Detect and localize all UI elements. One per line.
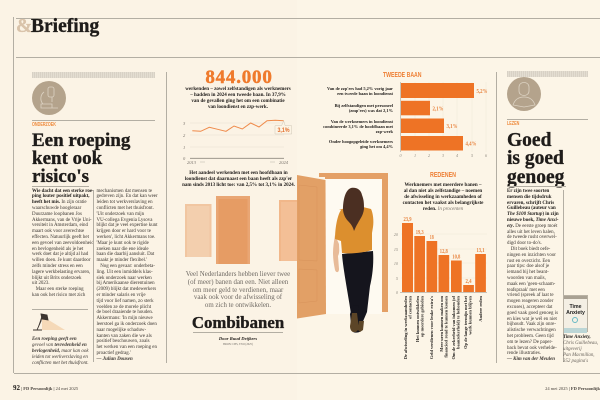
horizontal bar chart: 6 — [485, 153, 488, 158]
bar labels: zzp-werk Onder hoogopgeleide werknemers — [329, 129, 393, 144]
column chart: 0 — [396, 290, 399, 295]
article text: mensen die tijdsdruk — [507, 195, 551, 200]
book caption — [563, 334, 598, 364]
headline: genoeg — [507, 167, 564, 188]
reasons text: de afwisseling in werkzaamheden of — [404, 194, 482, 200]
column one text: zelfs minder stress en een — [32, 264, 83, 269]
footer right: 24 mei 2025 | FD Persoonlijk — [545, 386, 600, 391]
column two text — [96, 188, 158, 362]
line chart: 3 — [183, 121, 186, 126]
article text: Er zijn twee soorten — [507, 189, 549, 194]
chart caption: loondienst dat daarnaast een baan heeft als zzp'er — [185, 176, 292, 182]
article text: digd door to-do's. — [507, 241, 542, 246]
column two text: zoeken naar die ene ideale — [96, 247, 149, 252]
column chart: financieel rond te kunnen komen — [444, 295, 448, 358]
column two text: conflicten met het thuisfront. — [96, 206, 154, 211]
article text: back bevat ook verhelde- — [507, 346, 557, 351]
column two text: positief beschouwen, zoals — [96, 339, 150, 344]
article text: rust en overzicht. Een — [507, 259, 550, 264]
column one text: heeft het mis. In zijn oratie — [32, 200, 87, 205]
bar labels: ging het om 4,4% — [360, 144, 393, 148]
column two text: Nog een gevaar: onderbeta- — [100, 264, 155, 269]
book caption: Pan Macmillan, — [563, 352, 595, 358]
column chart: 19,3 — [416, 230, 424, 236]
column two text: (2009) blijkt dat medewerkers — [96, 287, 156, 292]
headline: Een roeping — [32, 130, 130, 150]
column one text: lagere werkbelasting ervaren, — [32, 270, 90, 275]
chart caption: Het aandeel werkenden met een hoofdbaan in — [189, 170, 288, 176]
column chart: De afwisseling in werkzaamheden — [403, 295, 408, 359]
panel: left article Onderzoek — [32, 72, 158, 366]
quote text: om zich te ontwikkelen. — [205, 302, 271, 309]
article text: alles uit het leven halen, — [507, 230, 555, 235]
headline: risico's — [32, 166, 89, 186]
column one text: en bevlogenheid als je het — [32, 247, 83, 252]
line chart: 1 — [183, 145, 185, 150]
reasons text: Werknemers met meerdere banen – — [404, 182, 482, 188]
article text: en kies wat je wél en niet — [507, 317, 557, 322]
column one text — [32, 188, 94, 298]
quote text: om meer geld te verdienen, maar — [193, 287, 283, 294]
column one text: kan ook het risico met zich — [32, 293, 85, 298]
column one text: Duurzame loopbanen Jos — [32, 212, 82, 217]
icon: desk lamp — [33, 314, 65, 330]
chart caption — [182, 170, 295, 188]
column two text: 'Uit onderzoek van mijn — [96, 212, 144, 217]
column one text: Maar een sterke roeping — [36, 287, 84, 292]
column two text: voelden ze de morele plicht — [96, 305, 151, 310]
article text: rende illustraties. — [507, 351, 541, 356]
heading: Tweede baan: TWEEDE BAAN — [383, 70, 422, 79]
horizontal bar chart: 2,1% — [432, 106, 444, 112]
column two text: maakt je minder flexibel.' — [96, 258, 147, 263]
masthead: Briefing: Briefing — [31, 16, 99, 37]
column two text: er minder salaris en vrije — [96, 293, 146, 298]
lamp caption: leiden tot werkverslaving en — [32, 355, 88, 360]
article text: goed vaak goed genoeg is — [507, 311, 558, 316]
reasons text: contacten het vaakst als belangrijkste — [403, 200, 483, 206]
right page background — [297, 0, 600, 400]
bar labels — [323, 86, 393, 149]
column two text: blijkt dat je veel expertise kunt — [96, 223, 158, 228]
column two text: baan die daarbij aansluit. Dat — [96, 252, 154, 257]
label: Onderzoek: ONDERZOEK — [32, 122, 56, 128]
reasons text — [402, 182, 484, 212]
article text: The $100 Startup) in zijn — [507, 212, 559, 217]
intro text: werkenden – zowel zelfstandigen als werknemers — [185, 86, 291, 92]
column chart: of contacten — [408, 295, 412, 319]
article text: Guillebeau (auteur van — [507, 206, 556, 211]
title: Combibanen: Combibanen — [192, 313, 284, 332]
bar labels: Van de zzp'ers had 5,2% vorig jaar — [327, 86, 393, 91]
column one text: uit 2023. — [32, 281, 50, 286]
panel: right article Lezen — [506, 71, 598, 364]
column chart: 20 — [394, 232, 399, 237]
bar labels: een tweede baan in loondienst Bij zelfstandigen met personeel — [335, 91, 393, 108]
column chart: 10 — [394, 261, 399, 266]
headline: is goed — [507, 148, 564, 169]
article text: alistische verwachtingen — [507, 328, 556, 333]
intro text: van loondienst en zzp-werk. — [208, 104, 268, 110]
column two text: 'Maar je kunt ook te rigide — [96, 241, 149, 246]
column two text: de boel draaiende te houden. — [96, 310, 153, 315]
article text: paar tips: doe alsof je — [507, 264, 549, 269]
article text: iemand bij het beant- — [507, 270, 549, 275]
line chart: 0 — [183, 156, 186, 161]
quote text: (of meer) banen dan een. Niet alleen — [188, 279, 288, 286]
hatched bar — [507, 71, 588, 77]
lamp caption: bevlogenheid, maar kan ook — [32, 349, 89, 354]
column one text: willen doen. Je kunt daardoor — [32, 258, 91, 263]
column chart: Het kunnen ontwikkelen — [415, 295, 420, 342]
article text: teafspraak' met een — [507, 288, 545, 293]
column two text: werken', licht Akkermans toe. — [96, 235, 155, 240]
column one text: blijkt uit Brits onderzoek — [32, 276, 82, 281]
article text: Dit boek biedt oefe- — [511, 247, 550, 252]
icon: microscope — [32, 81, 66, 115]
lamp caption: gevoel van tevredenheid en — [32, 343, 87, 348]
column one text: versiteit in Amsterdam, eind — [32, 223, 88, 228]
article text: nieuwe boek, Time Anxi- — [507, 218, 558, 223]
horizontal bar chart: 3,1% — [446, 123, 458, 130]
column chart: Om de zekerheid van inkomen (of — [451, 295, 456, 360]
column chart: 18 — [430, 235, 434, 241]
horizontal bar chart: 5,2% — [476, 88, 488, 95]
intro text: van de gevallen ging het om een combinatie — [191, 98, 285, 104]
bar labels: combineerde 3,1% de hoofdbaan met — [323, 124, 393, 129]
reasons text: al dan niet als zelfstandige – noemen — [404, 188, 482, 194]
hatched bar — [32, 72, 155, 78]
column chart: Geld verdienen voor leuke extra's — [429, 296, 434, 359]
column chart: baanzekerheid) te behouden — [456, 295, 460, 349]
book cover: Anxiety — [566, 310, 585, 316]
big number: 844.000 — [205, 66, 273, 88]
column one text: maart ook voor averechtse — [32, 229, 84, 234]
column chart: 2,4 — [466, 279, 472, 285]
column chart: 23,9 — [404, 217, 412, 223]
article text: — Kim van der Meulen — [507, 357, 555, 362]
lamp caption: conflicten met het thuisfront. — [32, 361, 89, 366]
column two text: naar mogelijke schaduw- — [96, 328, 146, 333]
column chart: 12,8 — [440, 249, 448, 255]
reasons text: reden. In procenten — [423, 206, 463, 212]
headline: kent ook — [32, 148, 102, 168]
label: Lezen: LEZEN — [507, 121, 519, 127]
line chart: 3,1% — [278, 127, 290, 134]
column two text: leiden tot werkverslaving en — [96, 200, 153, 205]
byline: Door Ruud Deijkers — [219, 336, 257, 341]
column two text: mechanismen dat mensen te — [96, 189, 152, 194]
quote text: vaak ook voor de afwisseling of — [194, 294, 282, 301]
line chart: 2 — [183, 133, 186, 138]
article text: het probleem. Geen tijd — [507, 334, 554, 339]
horizontal bar chart: 0 — [399, 153, 402, 158]
article text: vriend (spreek af laat te — [507, 293, 554, 298]
article text: om te lezen? De paper- — [507, 340, 553, 345]
chart caption: nam sinds 2013 licht toe: van 2,5% tot 3,1% in 2024. — [182, 182, 295, 188]
book caption: 352 pagina's — [563, 358, 588, 364]
horizontal bar chart: 4,4% — [466, 140, 476, 148]
book cover: Time — [569, 304, 582, 310]
column two text: proactief gedrag.' — [96, 351, 131, 356]
horizontal bar chart: 2 — [428, 153, 430, 158]
column two text: kanten van zaken die we als — [96, 334, 152, 339]
book cover — [563, 295, 588, 332]
column two text: gedreven zijn. En dat kan weer — [96, 194, 158, 199]
book caption: Time Anxiety, — [563, 334, 591, 340]
line chart: 2013 — [187, 160, 197, 165]
article text: ervaren, schrijft Chris — [507, 201, 554, 206]
article text: woorden van mails, — [507, 276, 546, 281]
quote text — [186, 271, 290, 309]
intro text — [185, 86, 291, 110]
column chart: Op de lange termijn met het — [463, 295, 468, 349]
column one text: werk doet dat je altijd al had — [32, 252, 88, 257]
book caption: Chris Guillebeau, — [563, 340, 598, 346]
column one text: Wie dacht dat een sterke roe- — [32, 189, 94, 194]
horizontal bar chart: 3 — [442, 153, 444, 158]
column two text: bij Amerikaanse dierentuinen — [96, 281, 155, 286]
column chart: werk kunnen blijven — [468, 295, 472, 335]
headline — [32, 130, 130, 186]
column one text: effecten. Natuurlijk geeft het — [32, 235, 89, 240]
horizontal bar chart: 1 — [414, 153, 416, 158]
article text: bijhoudt. Vaak zijn onre- — [507, 322, 556, 327]
lamp caption — [32, 336, 89, 366]
masthead: Briefing: & — [16, 16, 32, 37]
column two text: krijgen door er hard voor te — [96, 229, 151, 234]
headline — [507, 130, 564, 188]
column chart: Andere reden — [478, 295, 483, 322]
source: BRON: CBS, TNO (2025) — [223, 342, 253, 346]
article text: de tweede rusht overwel- — [507, 235, 557, 240]
article text: ningen en inzichten voor — [507, 253, 556, 258]
article text — [506, 188, 559, 362]
bar labels: (zmp'ers) was dat 2,1% Van de werknemers in loondienst — [331, 108, 393, 124]
icon: man reading — [507, 77, 541, 111]
column chart: Meer uren kunnen maken om — [439, 296, 444, 352]
column two text: siek onderzoek naar werken — [96, 276, 152, 281]
article text: ety. De eerste groep moét — [507, 224, 557, 229]
column chart: 13,1 — [476, 248, 484, 254]
column two text: tijd voor lief namen, zo sterk — [96, 299, 154, 304]
horizontal bar chart: 5 — [471, 153, 473, 158]
article text: maak een 'geen-schaam- — [507, 282, 555, 287]
article text: excuses), accepteer dat — [507, 305, 552, 310]
column one text: Akkermans, van de Vrije Uni- — [32, 218, 92, 223]
horizontal bar chart: 4 — [456, 153, 458, 158]
quote text: Veel Nederlanders hebben liever twee — [186, 271, 290, 278]
article text: mogen reageren zonder — [507, 299, 553, 304]
headline: Goed — [507, 130, 551, 150]
book caption: uitgeverij — [563, 346, 582, 352]
column two text: VU-collega Evgenia Lysova — [96, 218, 152, 223]
heading: Redenen: REDENEN — [430, 170, 456, 179]
line chart: 2024 — [279, 160, 289, 165]
column chart: op meerdere gebieden — [420, 295, 424, 337]
column chart: 10,8 — [452, 254, 460, 260]
column two text: leerstoel ga ik onderzoek doen — [96, 322, 157, 327]
column two text: Akkermans: 'In mijn nieuwe — [96, 316, 153, 321]
column two text: ling. Uit een inmiddels klas- — [96, 270, 153, 275]
column one text: waarschuwde hoogleraar — [32, 206, 81, 211]
column one text: ping louter positief uitpakt, — [32, 194, 90, 199]
column two text: — Julian Dousen — [96, 357, 133, 362]
column two text: het werken van een roeping en — [96, 345, 157, 350]
intro text: – hadden in 2024 een tweede baan. In 37,9% — [190, 92, 286, 98]
column chart: 5 — [396, 276, 398, 281]
footer left: 92 | FD Persoonlijk | 24 mei 2025 — [13, 384, 78, 392]
column one text: een gevoel van zeevoldoenheid — [32, 241, 94, 246]
column chart: 15 — [394, 247, 398, 252]
lamp caption: Een roeping geeft een — [32, 337, 77, 342]
